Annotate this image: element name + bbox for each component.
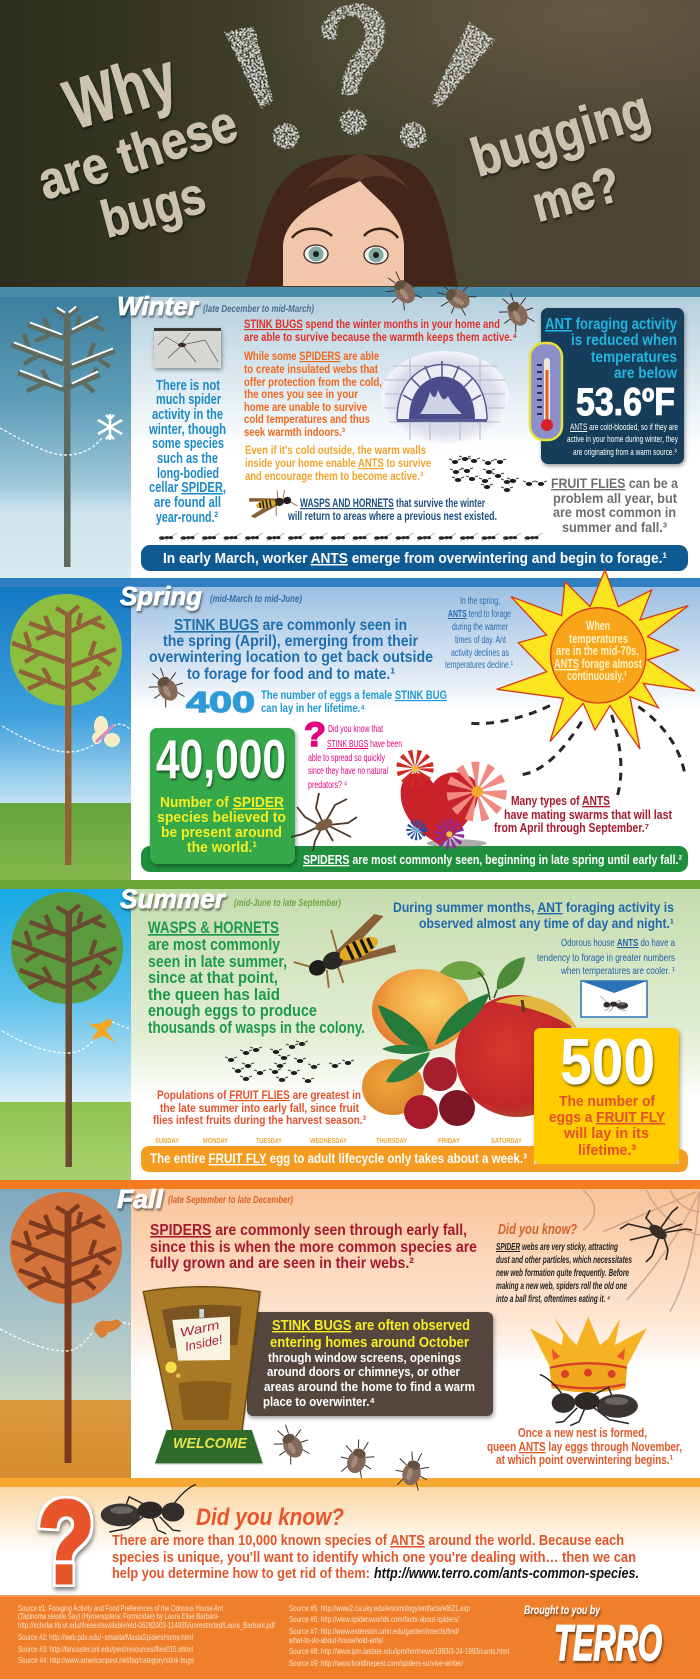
callout: did you know stink bugs xyxy=(304,716,402,791)
text: odorous house ants xyxy=(537,937,675,977)
text: queen ants: Once a new nest is formed, xyxy=(518,1425,647,1440)
sources column 2: Source #9: http://www.frontlinepest.com/spiders-survive-winter/ xyxy=(289,1658,463,1668)
text: fruit flies in winter: are most common in xyxy=(553,504,676,520)
days of the week: WEDNESDAY xyxy=(310,1138,347,1145)
stat: 400 eggs: 400 xyxy=(186,687,255,719)
text: spiders in winter: offer protection from the cold, xyxy=(244,375,382,389)
icon: sun with ant trails: temperatures xyxy=(569,631,628,646)
text: queen ants xyxy=(487,1425,682,1467)
icon: sun with ant trails: are in the mid-70s, xyxy=(556,643,639,658)
panel: stink bugs in fall: areas around the home to find a warm xyxy=(264,1380,475,1394)
chalk marks: exclamation and question marks xyxy=(225,4,495,149)
spring heading: (mid-March to mid-June) xyxy=(210,594,303,605)
icon: web spider xyxy=(620,1207,692,1262)
icon: sun with ant trails: When xyxy=(586,618,610,633)
summer heading xyxy=(120,884,342,914)
sources column 2: what-to-do-about-household-ants/ xyxy=(288,1635,383,1645)
panel: 40,000 spider species xyxy=(150,728,295,864)
title right: me? xyxy=(526,156,626,233)
panel: stink bugs in fall: around doors or chimneys, or other xyxy=(267,1365,460,1379)
text: stink bugs in spring xyxy=(149,617,433,683)
panel: ant foraging temperature: ANT foraging activity xyxy=(545,316,677,333)
panel: summer xyxy=(0,880,700,1180)
text: wasps and hornets in summer: WASPS & HORNETS xyxy=(148,918,279,937)
text: spiders in winter: home are unable to survive xyxy=(244,400,367,414)
callout: did you know spider webs: new web formation quite frequently. Before xyxy=(496,1268,629,1279)
text: ants in summer xyxy=(393,899,674,931)
header: chalkboard with woman and title xyxy=(0,0,700,287)
panel: 500 eggs xyxy=(534,1025,679,1164)
summer tree xyxy=(11,892,123,1167)
text: spiders in winter xyxy=(244,349,382,439)
text: wasps and hornets in summer: are most commonly xyxy=(148,935,280,954)
text: did you know body: http://www.terro.com/ants-common-species. xyxy=(374,1565,639,1582)
flight path and snowflake xyxy=(0,414,122,455)
text: wasps and hornets in summer: thousands of wasps in the colony. xyxy=(148,1018,365,1037)
text: spider activity in winter: are found all xyxy=(154,494,221,511)
text: stink bugs in winter xyxy=(244,317,517,344)
text: mating swarms: from April through September.⁷ xyxy=(494,820,649,835)
summer heading: (mid-June to late September) xyxy=(234,898,342,909)
title right xyxy=(464,79,657,233)
brought to you by: Brought to you by xyxy=(524,1603,601,1617)
sources column 1: http://scholar.lib.vt.edu/theses/available/etd-06282003-114935/unrestricted/Laura_Barbani.pdf xyxy=(18,1620,275,1630)
text: spider activity in winter: year-round.² xyxy=(156,509,218,526)
text: wasps and hornets in winter: WASPS AND HORNETS that survive the winter xyxy=(300,496,485,510)
panel: stink bugs in fall: STINK BUGS are often observed xyxy=(272,1318,470,1334)
stat: 400 eggs xyxy=(186,687,447,719)
text: wasps and hornets in summer: seen in late summer, xyxy=(148,952,287,971)
icon: heart with flowers xyxy=(401,759,492,847)
text: ants in summer: During summer months, ANT foraging activity is xyxy=(393,899,674,915)
winter heading: Winter xyxy=(117,291,200,321)
text: fruit flies in summer xyxy=(153,1088,366,1127)
text: ants in spring: temperatures decline.¹ xyxy=(445,660,513,671)
text: spider activity in winter: much spider xyxy=(156,391,221,408)
panel: stink bugs in fall xyxy=(247,1312,493,1416)
callout: did you know spider webs: making a new web, spiders roll the old one xyxy=(496,1281,627,1292)
text: spiders in winter: the ones you see in your xyxy=(244,387,358,401)
icon: sun with ant trails: continuously.¹ xyxy=(567,668,627,683)
panel: 500 eggs: 500 xyxy=(560,1025,655,1098)
icon: wasp large xyxy=(288,907,402,998)
callout: did you know stink bugs: since they have no natural xyxy=(308,766,388,777)
text: ants in spring xyxy=(445,596,513,671)
panel: 40,000 spider species: Number of SPIDER xyxy=(160,794,284,811)
text: fruit flies in winter: summer and fall.³ xyxy=(562,519,667,535)
days of the week: SUNDAY xyxy=(155,1138,179,1145)
panel: 40,000 spider species: 40,000 xyxy=(156,728,286,790)
text: fruit flies in winter: FRUIT FLIES can be a xyxy=(551,475,678,491)
days of the week xyxy=(155,1138,522,1145)
illustration: crown and queen ant xyxy=(530,1317,647,1426)
text: fruit flies in winter xyxy=(551,475,678,535)
winter heading: (late December to mid-March) xyxy=(203,304,315,315)
text: spider activity in winter: some species xyxy=(152,435,224,452)
did you know heading: Did you know? xyxy=(196,1504,344,1531)
sources column 2: Source #7: http://www.extension.umn.edu/garden/insects/find/ xyxy=(289,1626,459,1636)
icon: sun with ant trails xyxy=(470,570,695,798)
note: warm inside xyxy=(179,1318,224,1354)
text: spiders in winter: cold temperatures and thus xyxy=(244,412,370,426)
illustration: fruit xyxy=(362,957,579,1129)
icon: spider xyxy=(291,793,357,851)
title left: bugs xyxy=(95,166,212,250)
callout: did you know spider webs: Did you know? xyxy=(498,1221,577,1238)
callout bar: worker ants: In early March, worker ANTS emerge from overwintering and begin to forage.¹ xyxy=(163,550,667,567)
text: stink bugs in spring: STINK BUGS are commonly seen in xyxy=(174,617,407,634)
panel: 40,000 spider species: be present around xyxy=(161,824,282,841)
text: fruit flies in summer: flies infest fruits during the harvest season.³ xyxy=(153,1113,366,1127)
panel: 40,000 spider species: the world.¹ xyxy=(187,839,257,856)
flight path and butterfly xyxy=(2,716,130,752)
days of the week: FRIDAY xyxy=(438,1138,460,1145)
text: spiders in fall xyxy=(150,1222,477,1272)
text: spider activity in winter: There is not xyxy=(156,377,220,394)
icon: question mark: ? xyxy=(38,1477,94,1607)
text: odorous house ants: Odorous house ANTS do have a xyxy=(561,937,675,949)
callout: did you know spider webs: dust and other particles, which necessitates xyxy=(496,1255,632,1266)
callout bar: lifecycle: The entire FRUIT FLY egg to adult lifecycle only takes about a week.³ xyxy=(150,1150,527,1166)
text: stink bugs in spring: the spring (April), emerging from their xyxy=(163,633,418,650)
text: spiders in fall: since this is when the more common species are xyxy=(150,1239,477,1256)
callout: did you know stink bugs: STINK BUGS have been xyxy=(327,739,402,750)
text: fruit flies in summer: Populations of FRUIT FLIES are greatest in xyxy=(157,1088,361,1102)
text: wasps and hornets in summer: since at that point, xyxy=(148,968,278,987)
stat: 400 eggs: The number of eggs a female STINK BUG xyxy=(261,690,447,702)
panel: ant foraging temperature: 53.6ºF xyxy=(576,381,675,424)
icon: ant xyxy=(101,1484,196,1534)
icon: stink bugs crawling over the band xyxy=(379,265,539,335)
sources column 1: Source #4: http://www.americanpest.net/faq/category/stink-bugs xyxy=(18,1655,194,1665)
icon: fireplace xyxy=(381,351,509,443)
text: ants in spring: ANTS tend to forage xyxy=(448,609,511,620)
icon: flies cluster xyxy=(449,456,547,492)
panel: fall xyxy=(0,1180,700,1481)
panel: ant foraging temperature: are below xyxy=(614,365,677,382)
text: fruit flies in summer: the late summer into early fall, since fruit xyxy=(160,1101,359,1115)
text: ants in spring: In the spring, xyxy=(460,596,500,607)
winter tree xyxy=(11,306,115,567)
woman peeking xyxy=(245,153,458,286)
text: spider activity in winter: such as the xyxy=(157,450,218,467)
text: spiders in fall: fully grown and are seen in their webs.² xyxy=(150,1255,414,1272)
panel: 40,000 spider species: species believed to xyxy=(157,809,286,826)
days of the week: MONDAY xyxy=(203,1138,228,1145)
spring heading xyxy=(120,581,303,611)
text: spider activity in winter: winter, though xyxy=(148,421,226,438)
panel: winter xyxy=(0,287,700,578)
fall heading xyxy=(117,1184,294,1214)
stat: 400 eggs: can lay in her lifetime.⁴ xyxy=(261,703,365,715)
panel: ant foraging temperature: is reduced when xyxy=(571,332,677,349)
callout bar: spiders xyxy=(141,846,688,872)
cellar spider photo xyxy=(154,328,221,368)
icon: stink bugs on floor xyxy=(268,1419,379,1481)
footer xyxy=(0,1595,700,1679)
icon: ant envelope xyxy=(581,981,647,1017)
text: spider activity in winter: cellar SPIDER, xyxy=(149,479,226,496)
callout: did you know spider webs: SPIDER webs are very sticky, attracting xyxy=(496,1242,618,1253)
text: mating swarms: Many types of ANTS xyxy=(511,793,610,808)
spring heading: Spring xyxy=(120,581,202,611)
title left xyxy=(31,37,244,250)
icon: wasp xyxy=(247,487,298,521)
panel: stink bugs in fall: place to overwinter.⁴ xyxy=(263,1395,375,1409)
text: stink bugs in spring: to forage for food and to mate.¹ xyxy=(187,666,395,683)
text: stink bugs in winter: are able to survive because the warmth keeps them active.⁴ xyxy=(244,330,517,344)
panel: 500 eggs: lifetime.³ xyxy=(578,1142,636,1159)
icon: fruit flies cluster xyxy=(225,1041,354,1083)
title right: bugging xyxy=(464,79,657,189)
illustration: door with welcome mat xyxy=(143,1287,263,1463)
welcome mat text: WELCOME xyxy=(173,1435,248,1452)
days of the week: SATURDAY xyxy=(491,1138,522,1145)
text: ants in spring: times of day. Ant xyxy=(455,635,506,646)
panel: 500 eggs: eggs a FRUIT FLY xyxy=(549,1109,665,1126)
panel: stink bugs in fall: through window screens, openings xyxy=(268,1351,461,1365)
sources column 1: Source #2: http://web.pdx.edu/~smasta/MastaSpidersHome.html xyxy=(18,1632,193,1642)
icon: stink bug xyxy=(143,662,189,710)
ant row xyxy=(158,533,544,543)
flight path and bird xyxy=(2,1018,130,1053)
callout: did you know stink bugs: able to spread so quickly xyxy=(308,753,385,764)
callout: did you know stink bugs: ? xyxy=(304,716,326,754)
callout: did you know spider webs xyxy=(496,1221,632,1305)
illustration: spider web xyxy=(583,1190,700,1312)
text: did you know body xyxy=(112,1532,639,1582)
sources column 2: Source #8: http://www.ipm.iastate.edu/ipm/hortnews/1993/3-24-1993/cants.html xyxy=(289,1646,509,1656)
text: spider activity in winter: long-bodied xyxy=(157,465,219,482)
panel: ant foraging temperature xyxy=(541,308,684,464)
summer heading: Summer xyxy=(120,884,226,914)
fall heading: (late September to late December) xyxy=(168,1195,294,1206)
text: did you know body: help you determine how to get rid of them: xyxy=(112,1565,370,1582)
text: fruit flies in winter: problem all year, but xyxy=(553,490,677,506)
text: wasps and hornets in summer xyxy=(148,918,365,1037)
panel: ant foraging temperature: temperatures xyxy=(591,349,677,366)
icon: thermometer xyxy=(530,343,562,440)
text: mating swarms xyxy=(494,793,673,835)
sources column 2: Source #6: http://www.spidersworlds.com/facts-about-spiders/ xyxy=(289,1614,459,1624)
text: ants in winter: inside your home enable ANTS to survive xyxy=(245,456,431,470)
sources column 1 xyxy=(18,1603,275,1665)
panel: 500 eggs: will lay in its xyxy=(563,1125,649,1142)
sources column 1: Source #3: http://lancaster.unl.edu/pest/resources/flies015.shtml xyxy=(18,1644,193,1654)
text: spiders in winter: While some SPIDERS are able xyxy=(244,349,379,363)
text: ants in spring: activity declines as xyxy=(451,648,509,659)
callout bar: lifecycle xyxy=(141,1146,688,1172)
sources column 1: (Tapinoma sessile Say) (Hymenoptera: Formicidae) by Laura Elise Barbani- xyxy=(18,1611,219,1621)
days of the week: TUESDAY xyxy=(256,1138,282,1145)
days of the week: THURSDAY xyxy=(376,1138,407,1145)
icon: bug crossing band xyxy=(392,1448,433,1492)
text: wasps and hornets in summer: the queen has laid xyxy=(148,985,280,1004)
text: stink bugs in winter: STINK BUGS spend the winter months in your home and xyxy=(244,317,500,331)
note: warm inside: Inside! xyxy=(184,1332,224,1354)
text: spider activity in winter xyxy=(148,377,226,526)
fall heading: Fall xyxy=(117,1184,164,1214)
callout bar: worker ants xyxy=(141,545,688,571)
text: spiders in winter: seek warmth indoors.³ xyxy=(244,425,345,439)
title left: Why xyxy=(56,37,186,144)
spring tree xyxy=(10,594,122,865)
icon: sun with ant trails: ANTS forage almost xyxy=(554,656,642,671)
note: warm inside: Warm xyxy=(179,1318,221,1340)
text: spiders in fall: SPIDERS are commonly seen through early fall, xyxy=(150,1222,467,1239)
text: spiders in winter: to create insulated webs that xyxy=(244,362,378,376)
fall tree xyxy=(10,1192,122,1463)
text: did you know body: There are more than 10,000 known species of ANTS around the world. Because each xyxy=(112,1532,624,1549)
text: ants in winter: and encourage them to become active.³ xyxy=(245,469,423,483)
panel: stink bugs in fall: entering homes around October xyxy=(270,1335,469,1351)
panel: 500 eggs: The number of xyxy=(559,1093,656,1110)
winter heading xyxy=(117,291,315,321)
sources column 1: Source #1: Foraging Activity and Food Preferences of the Odorous House Ant xyxy=(18,1603,223,1613)
panel: did you know ants xyxy=(0,1448,700,1607)
panel: spring xyxy=(0,570,700,880)
text: spider activity in winter: activity in the xyxy=(152,406,223,423)
text: ants in winter xyxy=(245,443,431,483)
sources column 2 xyxy=(288,1603,509,1668)
text: wasps and hornets in winter: will return to areas where a previous nest existed. xyxy=(287,509,497,523)
text: stink bugs in spring: overwintering location to get back outside xyxy=(149,649,433,666)
text: wasps and hornets in winter xyxy=(287,496,497,523)
callout: did you know stink bugs: Did you know that xyxy=(328,724,383,735)
text: ants in spring: during the warmer xyxy=(452,622,508,633)
text: ants in winter: Even if it's cold outside, the warm walls xyxy=(245,443,426,457)
flight path and leaf xyxy=(0,1320,130,1351)
callout: did you know stink bugs: predators? ⁴ xyxy=(308,780,347,791)
title left: are these xyxy=(31,94,244,211)
sources column 2: Source #5: http://www2.ca.uky.edu/entomology/entfacts/ef621.asp xyxy=(289,1603,470,1613)
text: wasps and hornets in summer: enough eggs to produce xyxy=(148,1001,317,1020)
callout: did you know spider webs: into a ball first, oftentimes eating it. ⁴ xyxy=(496,1294,610,1305)
